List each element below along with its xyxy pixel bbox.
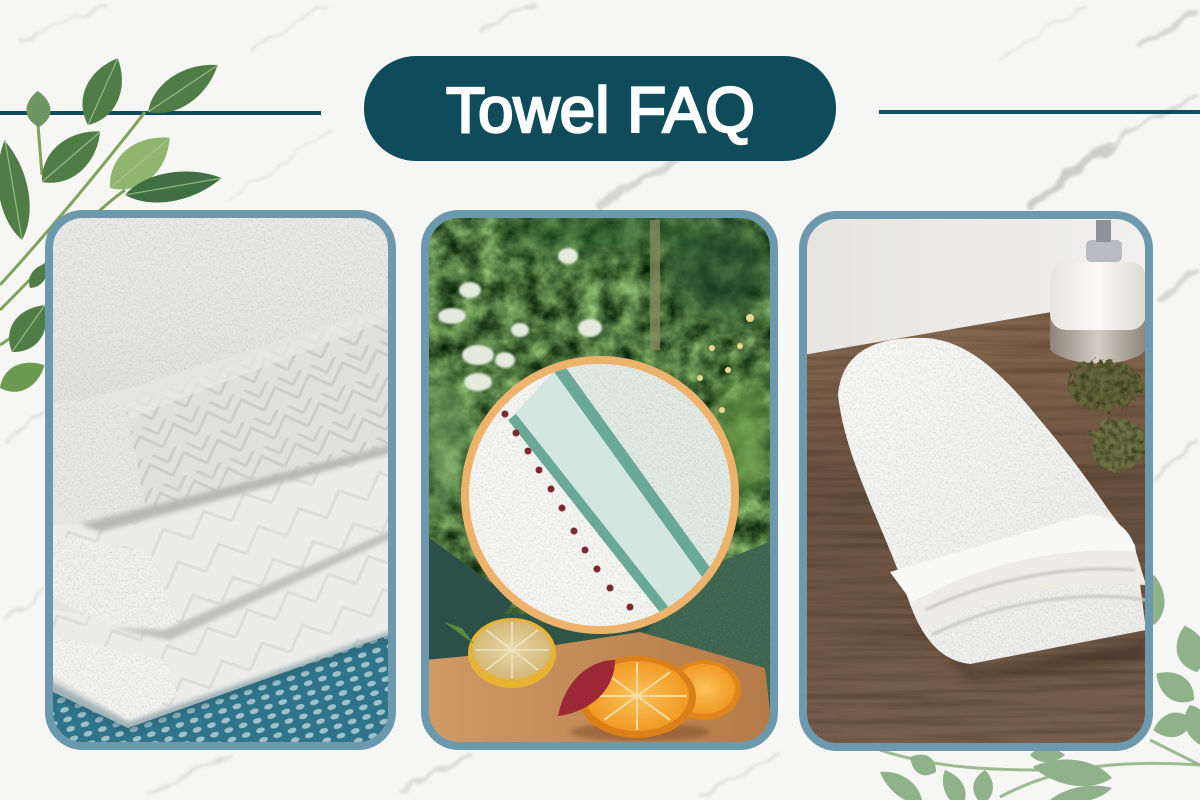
orange slice back [679,660,741,720]
wall [803,215,1149,365]
dark foliage and mat [425,535,515,660]
rolled towel shadow [946,640,1145,682]
middle towel [49,450,392,630]
decorative rule right [879,110,1200,114]
maroon stitches [502,410,634,610]
botanical sprig bottom right [880,575,1200,800]
title pill [364,56,836,161]
mint band [512,367,708,612]
panel: striped towel with citrus [425,208,775,746]
towel hem [890,515,1136,602]
dried greenery [1067,361,1146,471]
top towel patterned band [126,324,388,506]
decorative rule left [0,111,321,115]
shadow between towels [80,445,392,532]
botanical sprig top left [0,51,226,399]
panel: rolled towel on wood [803,215,1149,747]
panel frame [49,214,392,746]
dark base behind the lens [500,614,770,711]
towel inner roll [912,551,1146,632]
lemon [468,618,556,688]
top towel flat surface [49,214,392,408]
band edge highlight [125,305,392,418]
garden background [425,214,774,614]
lower towel fold [49,635,178,722]
middle towel fold [53,538,177,628]
panel: stacked white towels [49,214,392,746]
lower towel [88,616,146,632]
title: Towel FAQ [446,74,755,146]
green stripes [512,417,666,612]
red leaf [558,660,615,716]
towel roll folds [925,569,1146,635]
panel frame [803,215,1149,747]
wooden board [425,632,774,746]
top towel fold [49,400,146,522]
blue dotted mat [49,634,392,746]
soap dispenser [1050,220,1146,364]
mat shadow [49,630,392,734]
orange slice front [578,656,696,738]
magnified fabric circle [461,356,739,634]
green sprig [444,622,474,644]
wooden table [803,295,1149,747]
lower shadow [110,530,392,640]
rolled towel body [838,338,1146,664]
panel frame [425,214,774,746]
upper right pale area [561,364,731,572]
wood grain [803,295,1149,747]
board shadow [570,723,710,741]
